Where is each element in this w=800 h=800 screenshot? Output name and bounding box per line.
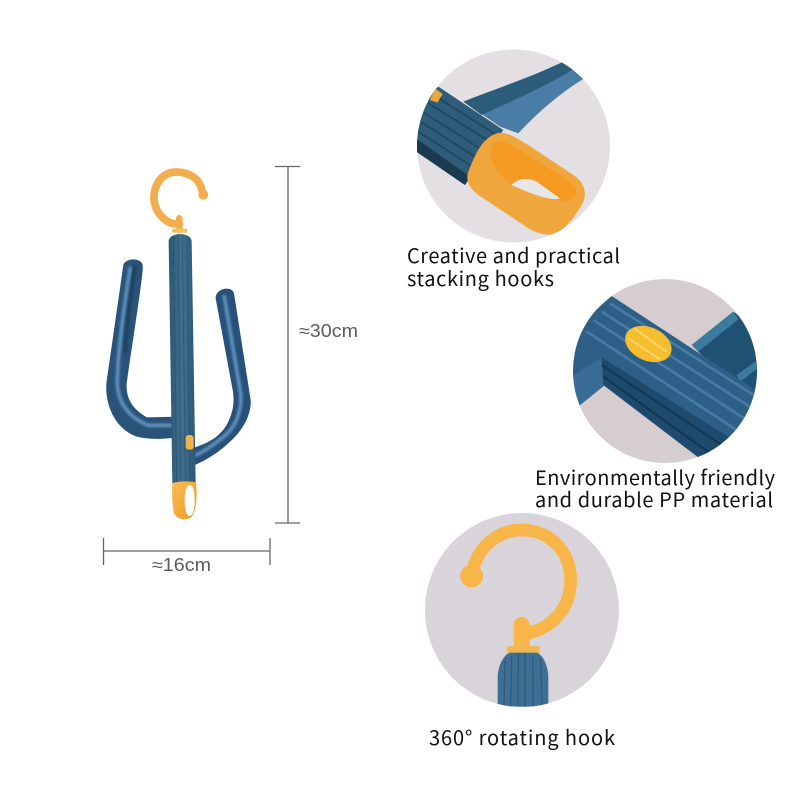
- caption: stacking hooks: Creative and practical: [407, 240, 620, 269]
- detail circle: stacking hook loop: [407, 50, 610, 242]
- tiny yellow button: [430, 88, 443, 103]
- yellow oval button: [625, 326, 672, 362]
- caption: rotating hook: 360° rotating hook: [429, 722, 615, 751]
- horizontal dimension line: [103, 538, 270, 565]
- arm behind the rod: [464, 62, 583, 134]
- detail circle: 360 rotating hook: [425, 513, 619, 707]
- orange hook arc: [472, 530, 571, 647]
- hanger left arm: [106, 259, 179, 439]
- hook collar: [507, 646, 540, 653]
- product: hanger with hook and arms: [106, 172, 251, 519]
- orange loop with hole: [467, 133, 585, 235]
- hanger central rod with ribs: [169, 234, 196, 483]
- caption: PP material: Environmentally friendly: [535, 462, 776, 491]
- caption: stacking hooks: stacking hooks: [407, 263, 554, 292]
- hook end ball: [460, 565, 483, 587]
- hanger yellow button: [186, 435, 194, 450]
- right arm section: [692, 312, 757, 396]
- left arm section: [573, 358, 604, 406]
- ribbed rod: [417, 86, 504, 185]
- hanger top orange hook: [154, 172, 208, 233]
- detail circle: PP material close-up: [573, 279, 757, 463]
- hanger right arm: [195, 289, 251, 465]
- ribbed rod top: [498, 653, 548, 707]
- hanger bottom orange loop: [172, 481, 197, 519]
- width label: ≈16cm: [152, 555, 211, 575]
- caption: PP material: and durable PP material: [535, 484, 773, 513]
- height label: ≈30cm: [299, 321, 358, 341]
- ribbed rod diagonal: [573, 296, 756, 457]
- vertical dimension line: [275, 166, 300, 523]
